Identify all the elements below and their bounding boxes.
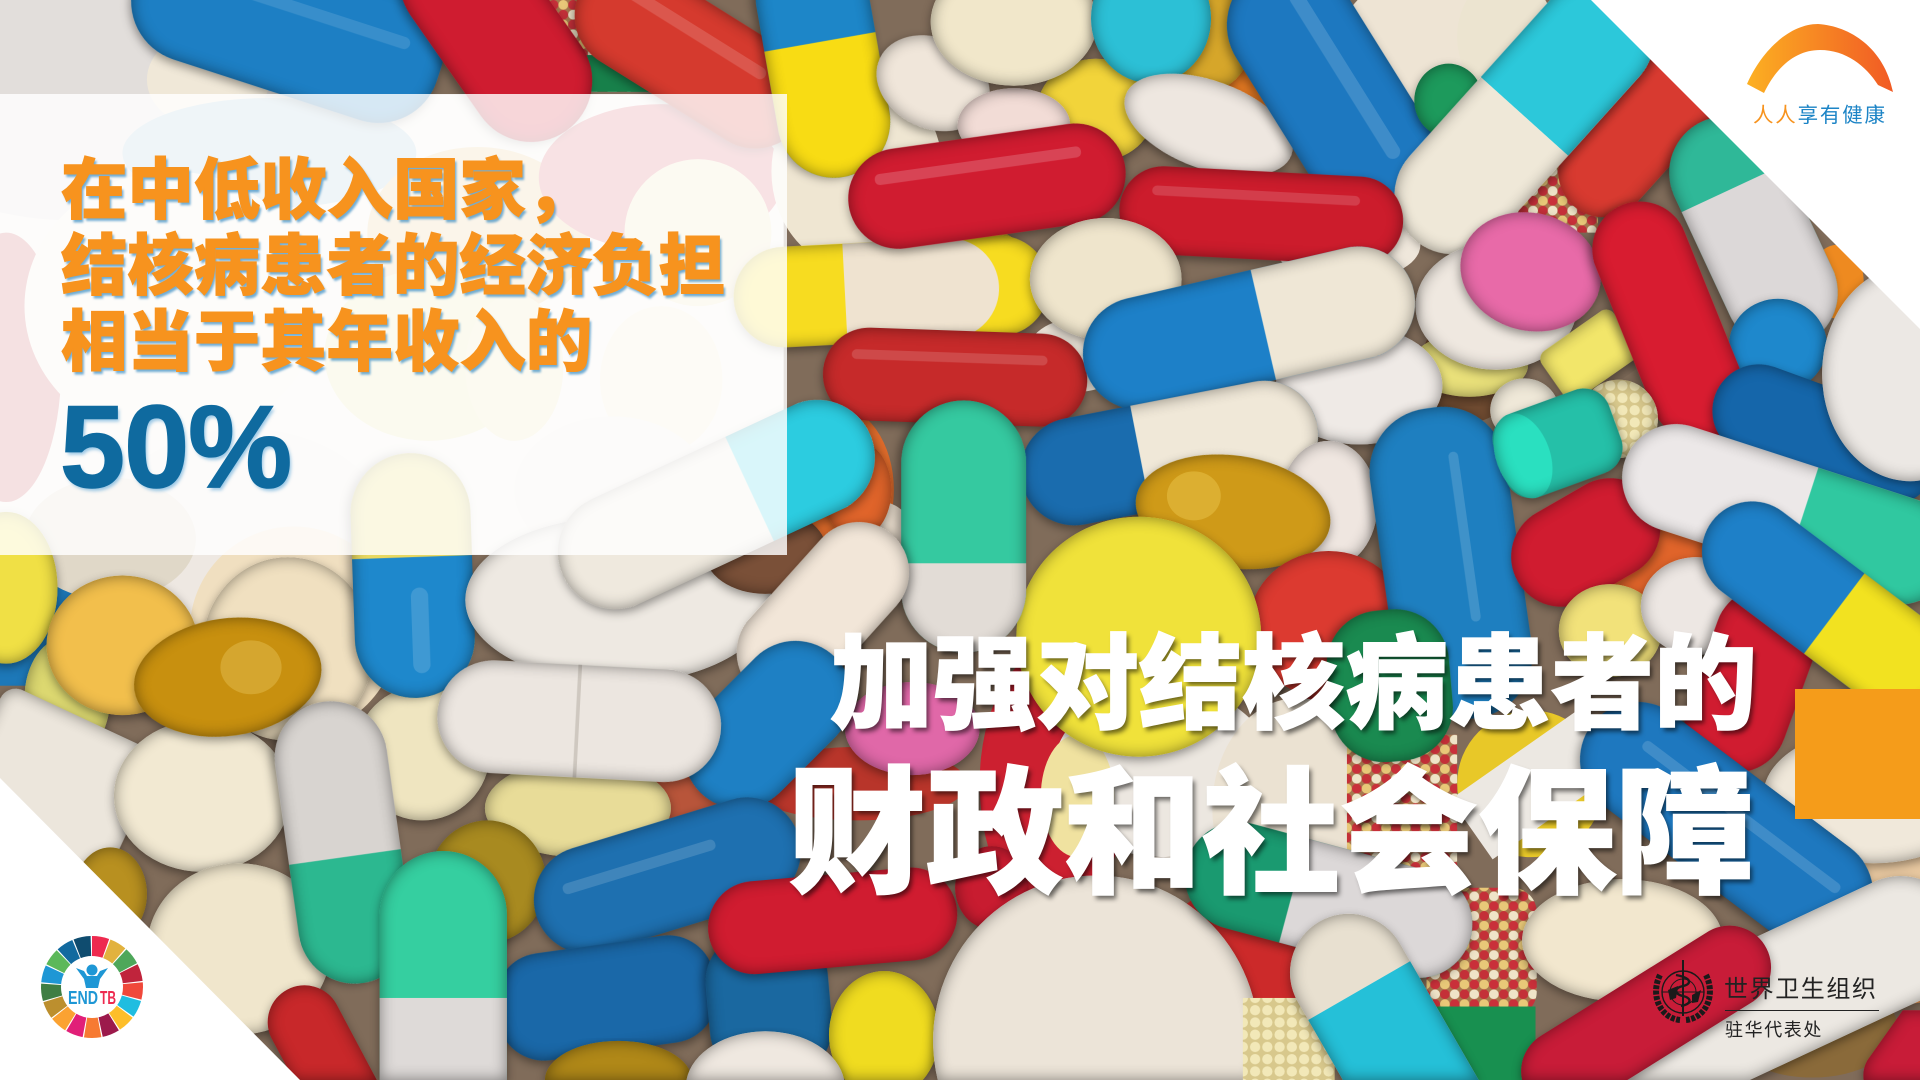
pills: right lower [933, 605, 1920, 1080]
logo: WHO emblem [1653, 960, 1713, 1023]
title line 1: 加强对结核病患者的 [830, 627, 1757, 742]
WHO rule [1725, 1010, 1879, 1011]
pills: left and centre lower [0, 381, 1029, 1080]
WHO text: 世界卫生组织 驻华代表处 [1724, 976, 1879, 1040]
title: white headline [788, 627, 1758, 912]
pills: top row [115, 0, 1920, 518]
orange accent block [1795, 689, 1920, 819]
heading: orange statement [60, 154, 726, 380]
logo text: 人人享有健康: 人人享有健康 [1753, 104, 1887, 127]
title line 2: 财政和社会保障 [788, 758, 1754, 912]
panel: translucent white text panel [0, 94, 787, 555]
WHO name: 世界卫生组织 [1724, 976, 1878, 1003]
statement line 1: 在中低收入国家， [61, 154, 592, 228]
logo: END TB wheel [41, 936, 143, 1038]
logo: END TB wheel: END [68, 988, 98, 1008]
statement line 3: 相当于其年收入的 [61, 306, 592, 380]
statement line 2: 结核病患者的经济负担 [61, 230, 725, 304]
logo: END TB wheel: TB [100, 988, 116, 1008]
big number: 50%: 50% [60, 381, 291, 512]
WHO office: 驻华代表处 [1725, 1020, 1823, 1040]
pills: upper middle row [731, 117, 1920, 787]
